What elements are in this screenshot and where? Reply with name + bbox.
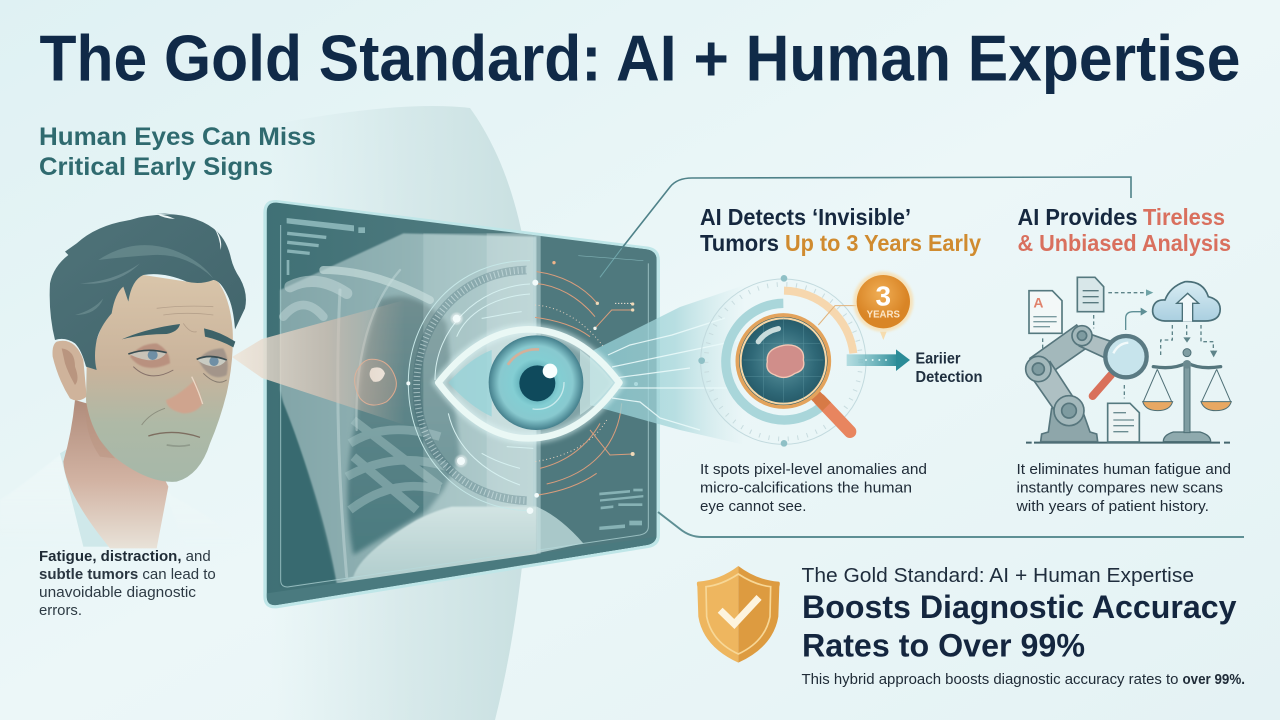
pupil <box>519 365 555 401</box>
scales <box>1143 349 1231 442</box>
heading: ai provides: AI Provides <box>1018 204 1138 230</box>
text: gold standard conclusion: Rates to Over 99% <box>802 628 1085 664</box>
document a <box>1029 291 1062 333</box>
icon: magnifier with tumor and 3 years badge: YEARS <box>867 309 901 320</box>
human gaze beam <box>232 300 405 425</box>
text: ai provides body <box>1015 461 1231 515</box>
tumor <box>767 345 804 377</box>
connector tick on screen <box>600 248 622 277</box>
eye highlight <box>543 364 557 378</box>
eye outline <box>438 329 619 438</box>
bracket connector top <box>622 177 1131 248</box>
hair <box>50 213 246 370</box>
handle <box>820 400 850 432</box>
text: gold standard conclusion: This hybrid approach boosts diagnostic accuracy rates to <box>802 672 1178 688</box>
clavicle and shoulder <box>283 270 430 577</box>
text: ai provides body: instantly compares new scans <box>1016 480 1223 496</box>
abdomen <box>337 507 537 583</box>
shirt collar <box>60 448 110 547</box>
icon: gold shield with check <box>697 566 780 663</box>
text: gold standard conclusion: over 99%. <box>1182 672 1245 688</box>
pale backdrop circle <box>270 106 533 720</box>
text: ai detects body <box>700 461 927 515</box>
heading: ai detects <box>700 204 981 256</box>
document a: A <box>1033 294 1043 310</box>
spine <box>423 233 534 516</box>
chest <box>280 233 537 583</box>
eye bags <box>130 343 170 368</box>
ai beam to detection <box>590 285 745 445</box>
magnifier <box>1093 336 1147 396</box>
text: gold standard conclusion <box>802 565 1245 688</box>
beam data lines <box>608 318 740 430</box>
text: ai detects body: eye cannot see. <box>700 498 806 515</box>
label: earlier detection: Eariier <box>916 350 960 368</box>
mouth and lines <box>142 408 200 446</box>
HUD nodes <box>406 261 638 514</box>
arrow <box>847 354 898 366</box>
icon: robot arm, documents, cloud and scales <box>1026 277 1231 443</box>
text: ai provides body: with years of patient history. <box>1015 498 1209 515</box>
gauge rings <box>701 279 866 444</box>
heading: ai detects: Up to 3 Years Early <box>785 230 981 256</box>
doctor coat <box>0 448 253 560</box>
text: fatigue caption: unavoidable diagnostic <box>39 584 197 601</box>
tumor marker <box>355 359 396 405</box>
document top <box>1077 277 1104 312</box>
badge connector <box>818 306 857 325</box>
screen UI lines <box>287 218 643 530</box>
heading: ai provides <box>1018 204 1231 256</box>
ribs <box>347 420 447 510</box>
heading: human eyes: Human Eyes Can Miss <box>39 123 316 151</box>
x-ray base <box>260 190 670 610</box>
text: fatigue caption: errors. <box>39 602 82 619</box>
cloud <box>1153 282 1220 322</box>
illustration: tired doctor <box>0 213 253 560</box>
document bottom <box>1108 403 1139 442</box>
text: gold standard conclusion: The Gold Standard: AI + Human Expertise <box>802 565 1194 587</box>
screen inner border <box>281 225 648 587</box>
screen glow edge <box>263 200 660 608</box>
label: earlier detection: Detection <box>916 369 982 386</box>
lung <box>347 296 460 555</box>
eyebrows <box>122 324 180 339</box>
text: fatigue caption: subtle tumors can lead to <box>39 566 216 583</box>
icon: magnifier with tumor and 3 years badge: 3 <box>876 280 891 311</box>
text: ai detects body: micro-calcifications the human <box>700 480 912 496</box>
label: earlier detection <box>916 350 982 386</box>
panel: x-ray screen <box>260 190 670 610</box>
heading: ai detects: AI Detects ‘Invisible’ <box>700 204 911 230</box>
text: gold standard conclusion: Boosts Diagnostic Accuracy <box>802 589 1237 625</box>
bottom bar <box>267 537 657 607</box>
eye glow <box>438 329 619 438</box>
left eye <box>129 351 167 360</box>
robot arm <box>1026 325 1112 442</box>
lens <box>737 315 829 407</box>
ear <box>52 341 87 400</box>
heading: ai provides: Tireless <box>1143 204 1225 230</box>
text: ai provides body: It eliminates human fatigue and <box>1016 461 1231 478</box>
heading: ai provides: & Unbiased Analysis <box>1018 230 1231 256</box>
bracket connector bottom <box>658 512 1244 537</box>
icon: magnifier with tumor and 3 years badge <box>698 272 913 447</box>
heading: human eyes <box>39 123 316 181</box>
iris <box>489 335 583 430</box>
HUD rings <box>408 261 633 511</box>
forehead wrinkles <box>157 306 213 332</box>
text: ai detects body: It spots pixel-level anomalies and <box>700 461 927 478</box>
heading: ai detects: Tumors <box>700 230 779 256</box>
text: fatigue caption <box>39 548 216 619</box>
ground line <box>1026 440 1230 446</box>
dashed connectors <box>1043 293 1213 398</box>
right eye <box>197 357 227 367</box>
nose <box>166 380 203 413</box>
text: fatigue caption: Fatigue, distraction, and <box>39 548 211 565</box>
badge <box>853 272 913 332</box>
neck <box>63 400 168 548</box>
right side dark <box>537 237 657 567</box>
face <box>86 275 233 482</box>
icon: central ai eye <box>438 329 619 438</box>
heading: human eyes: Critical Early Signs <box>39 153 273 181</box>
